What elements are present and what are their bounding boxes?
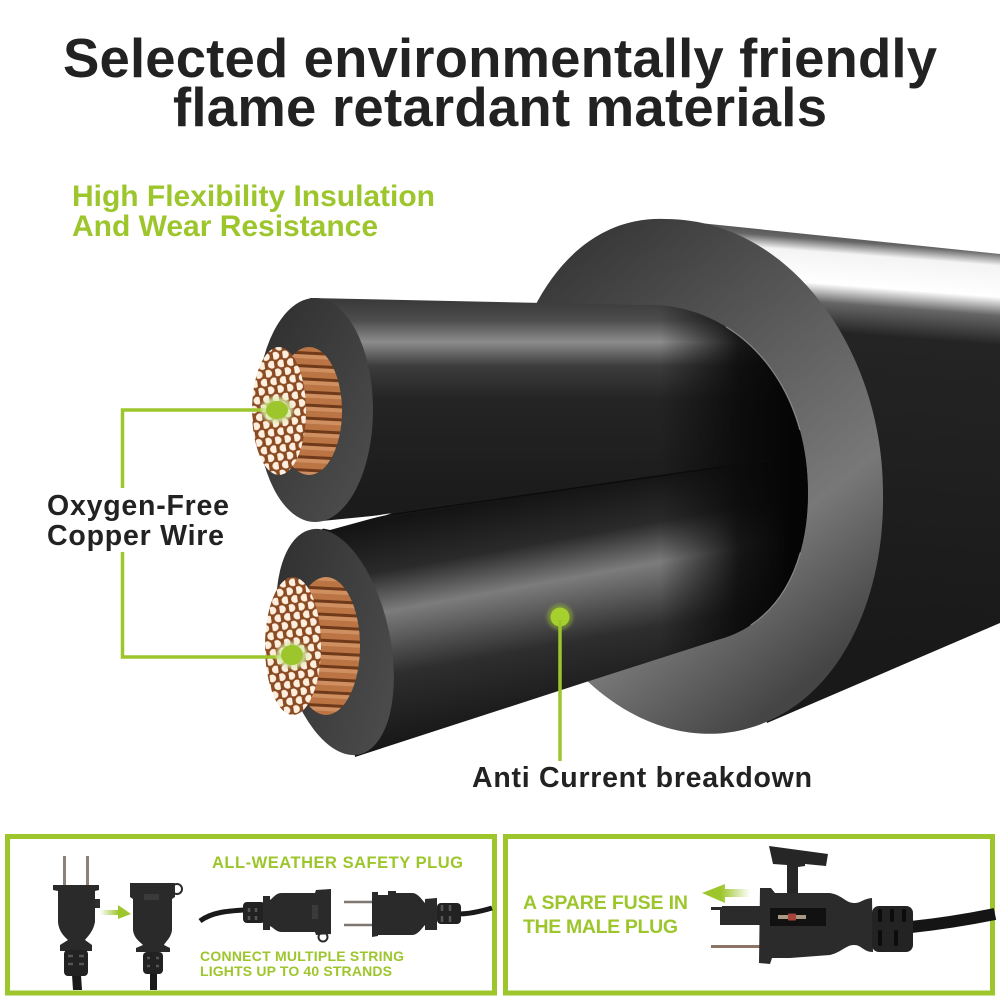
icon: vertical female socket (130, 883, 182, 990)
upper wire body (310, 298, 806, 521)
label: copper wire (47, 490, 229, 552)
text: spare fuse: A SPARE FUSE IN (523, 892, 688, 914)
upper wire end face (257, 298, 373, 522)
hole shadow (666, 307, 808, 651)
callout: insulation dot and line (547, 604, 573, 761)
text: connect multiple: LIGHTS UP TO 40 STRANDS (200, 963, 392, 979)
title (63, 28, 938, 138)
label: copper wire: Oxygen-Free (47, 490, 229, 522)
text: spare fuse (523, 892, 688, 938)
callout dot: lower copper (276, 642, 308, 668)
hole rim highlight (640, 305, 808, 640)
heading: insulation (72, 180, 435, 243)
copper strand tips (265, 577, 321, 715)
panel border (8, 836, 494, 993)
callout dot: upper copper (261, 397, 293, 423)
text: spare fuse: THE MALE PLUG (523, 916, 678, 938)
icon: vertical male plug (53, 856, 100, 990)
text: connect multiple (200, 948, 404, 979)
outer cable sheath (680, 221, 1000, 723)
outer sheath end ring (500, 219, 883, 734)
text: all-weather: ALL-WEATHER SAFETY PLUG (212, 854, 463, 872)
icon: horizontal male plug (344, 891, 492, 937)
heading: insulation: And Wear Resistance (72, 210, 378, 243)
lower wire end face (257, 518, 413, 766)
label: anti current breakdown: Anti Current breakdown (472, 762, 812, 794)
icon: male plug with fuse (711, 846, 995, 964)
copper strand tips (252, 347, 306, 475)
arrow: fuse slides out (702, 884, 750, 903)
arrow: plug into socket (100, 905, 131, 919)
copper strands side (292, 577, 360, 715)
title: Selected environmentally friendly (63, 28, 938, 89)
copper strands side (276, 347, 342, 475)
text: connect multiple: CONNECT MULTIPLE STRING (200, 948, 404, 964)
panel border (506, 836, 992, 993)
label: copper wire: Copper Wire (47, 520, 224, 552)
upper copper conductor (252, 347, 342, 475)
panel: safety plug (8, 836, 494, 993)
lower copper conductor (265, 577, 360, 715)
callout: copper wire connector lines (122, 410, 292, 657)
white gap between wires (312, 513, 392, 530)
heading: insulation: High Flexibility Insulation (72, 180, 435, 213)
panel: spare fuse (506, 836, 995, 993)
inner wires (310, 298, 808, 757)
lower wire body (322, 456, 808, 757)
seam between wires (375, 467, 724, 518)
icon: horizontal female socket (200, 889, 331, 942)
title: flame retardant materials (173, 77, 827, 138)
